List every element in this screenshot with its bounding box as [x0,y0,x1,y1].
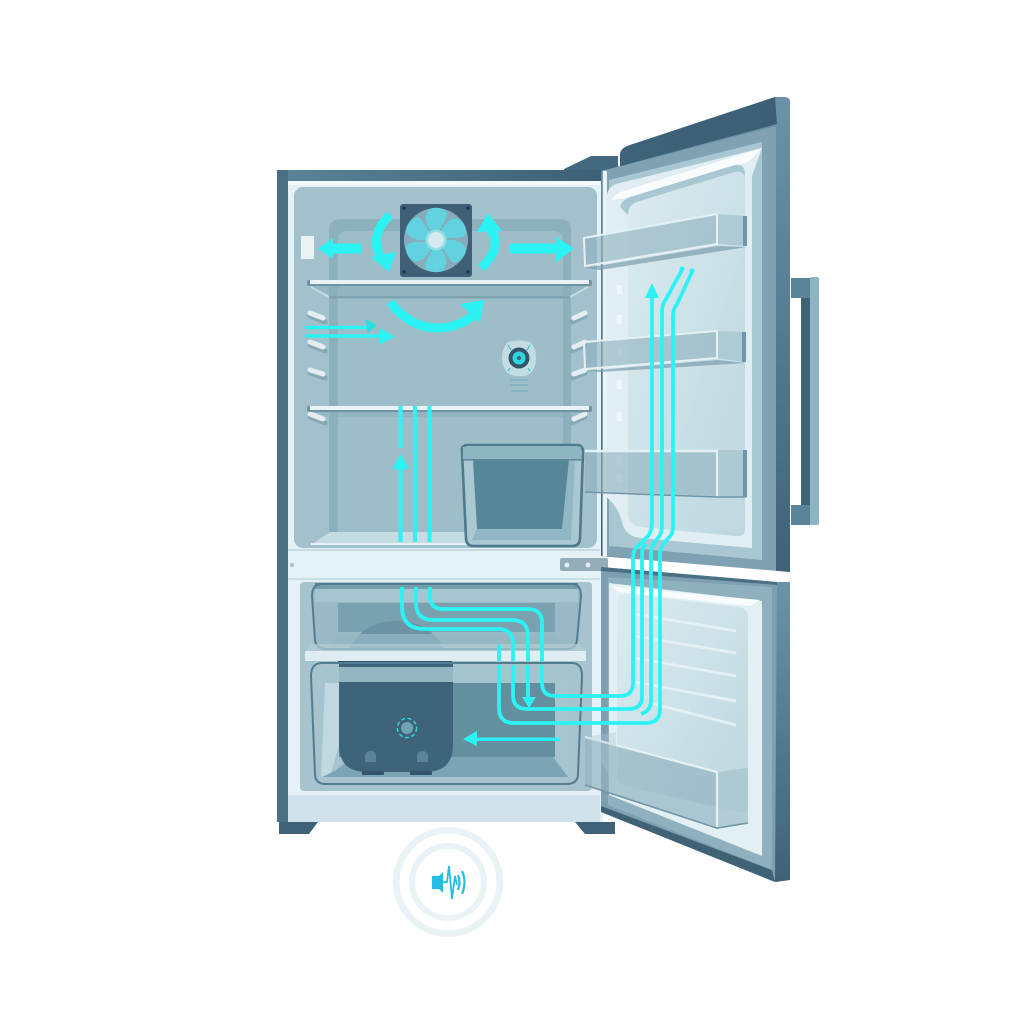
fridge shelf: upper [307,280,592,298]
panel: fridge interior [294,187,597,548]
hinge [560,558,608,571]
panel: upper door [601,97,790,572]
airflow: arrow to door [509,237,574,262]
door bin: third [585,450,747,497]
freezer shelf [305,644,586,664]
door bin: bottom [585,732,748,828]
shelf floor [311,532,565,545]
top hinge [564,156,618,170]
door vents [635,614,736,725]
crisper bin [462,445,583,546]
airflow: arrow to light [318,238,361,259]
panel: freezer interior [300,582,592,791]
freezer drawer: lower [311,663,582,784]
airflow: thin arrows from left wall [305,319,395,344]
airflow: fridge vertical lines [392,406,430,542]
airflow: fan right curve [477,213,502,268]
light switch [301,236,314,259]
door bin: top [584,214,747,270]
lower drawer back [321,683,572,777]
airflow: freezer ducts to door [402,266,694,723]
freezer drawer: upper [312,584,581,649]
gap between doors [623,558,790,581]
airflow: arrow to compressor [463,731,560,746]
fridge shelf: lower [307,406,592,417]
icon: temperature sensor [502,340,536,391]
cabinet body [277,170,603,822]
wall pegs: left and right [310,313,585,423]
icon: fan [400,204,472,277]
foot: left [279,822,318,834]
panel: lower door [601,567,790,882]
airflow: fan left curve [371,215,396,272]
compressor [339,621,453,775]
door bin: second [584,331,746,372]
door handle [791,277,819,525]
airflow: shelf curve [390,300,484,328]
foot: right [575,822,615,834]
icon: sound waves [396,830,500,934]
